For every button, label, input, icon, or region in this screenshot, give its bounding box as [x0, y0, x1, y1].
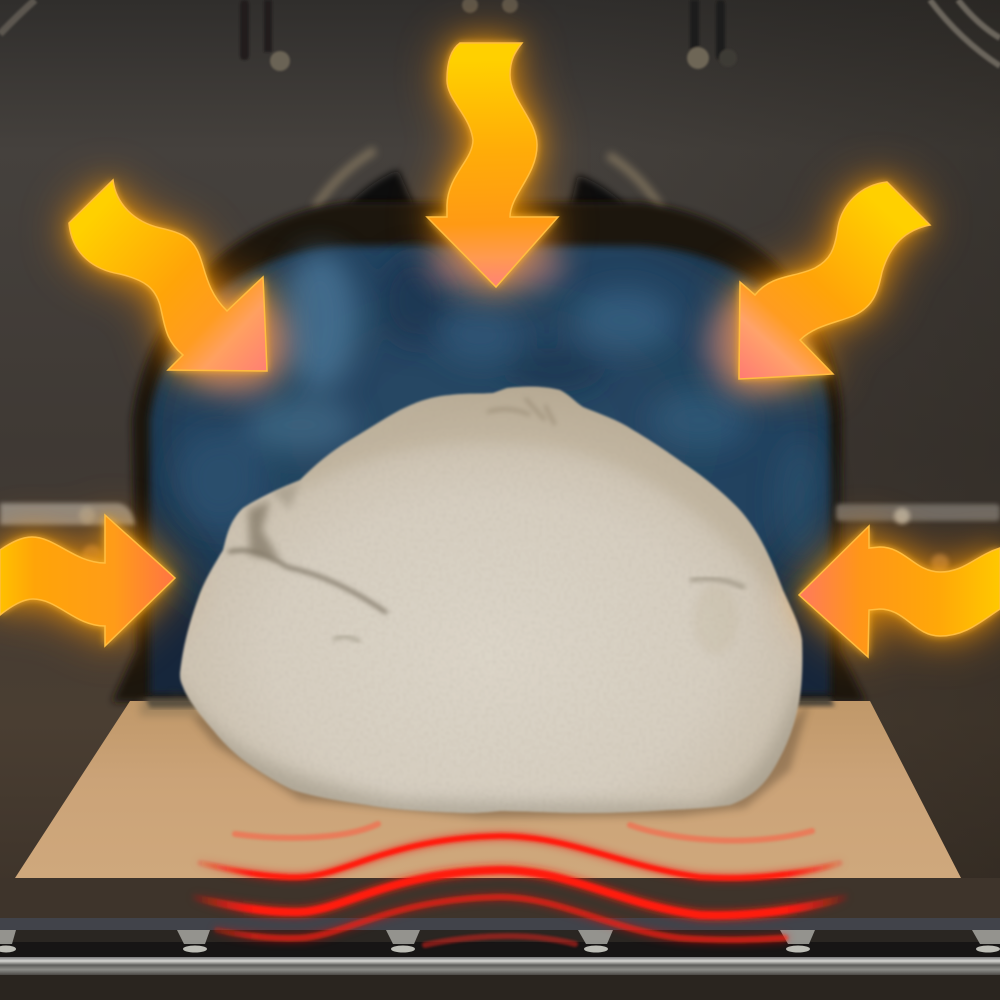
arrow: middle left	[0, 515, 175, 646]
arrow: top	[426, 43, 566, 293]
wave: faint outer strokes	[235, 824, 812, 945]
wire rack arch behind the panel	[315, 150, 662, 210]
wave: bright core layer	[192, 836, 848, 940]
arrow: upper right	[705, 182, 930, 395]
oven hardware: top pegs and corner coil	[0, 0, 1000, 71]
arrow: upper left	[69, 180, 290, 395]
dough: top knob	[487, 398, 555, 425]
bottom rail with screws	[0, 918, 1000, 1000]
arrow: middle right	[799, 526, 1000, 657]
heat waves rising from the floor	[192, 824, 848, 945]
dough ball	[170, 370, 812, 825]
dough: tan upper fold band	[302, 402, 780, 590]
back panel: blue mottled oven window	[112, 202, 866, 702]
baking tray	[15, 698, 961, 878]
dough: main crease	[228, 550, 387, 613]
oven floor band	[0, 878, 1000, 918]
wave: glow layer	[192, 836, 848, 940]
dough shadow on tray	[140, 690, 810, 818]
side rack rails	[0, 503, 1000, 572]
dough: crumpled left folds	[248, 482, 300, 560]
